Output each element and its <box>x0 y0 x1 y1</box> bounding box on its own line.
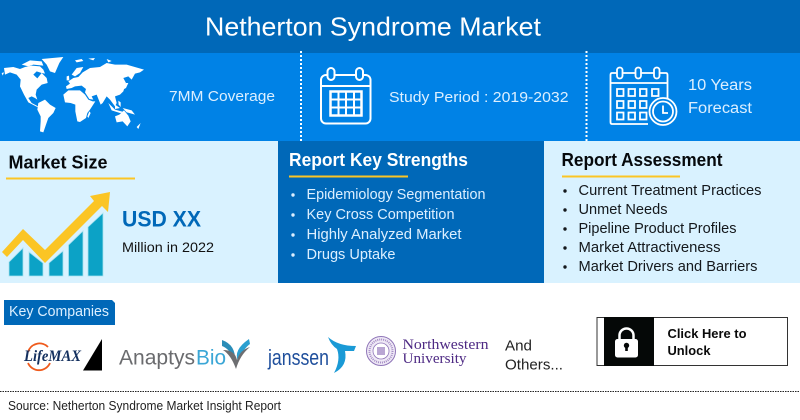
dotted divider 2 <box>586 51 588 141</box>
icon: padlock <box>615 328 638 358</box>
market value: USD XX <box>122 206 201 232</box>
study period label: Study Period : 2019-2032 <box>389 89 568 106</box>
list: assessment: Market Attractiveness <box>578 240 720 256</box>
logo: Janssen: janssen <box>267 345 329 370</box>
key companies tag <box>4 300 115 325</box>
list: key strengths: Key Cross Competition <box>306 207 454 223</box>
panel: market size <box>0 141 278 283</box>
market value note: Million in 2022 <box>122 239 214 255</box>
logo: Northwestern University <box>366 336 489 367</box>
icon: world map <box>2 57 144 132</box>
heading: market size: Market Size <box>8 152 108 172</box>
icon: forecast calendar with clock <box>610 68 676 125</box>
key companies tag: Key Companies <box>9 304 109 320</box>
chart: growth bars and arrow <box>2 192 110 276</box>
logo: AnaptysBio <box>119 339 250 370</box>
list: assessment: Unmet Needs <box>578 202 668 218</box>
icon: study period calendar <box>321 68 370 124</box>
coverage label: 7MM Coverage <box>169 88 275 105</box>
title: Netherton Syndrome Market <box>205 12 542 42</box>
logo: Northwestern University: University <box>402 351 467 367</box>
list: key strengths: Highly Analyzed Market <box>306 227 462 243</box>
coverage strip <box>0 51 800 141</box>
unlock button <box>597 317 788 366</box>
logo: Northwestern University: Northwestern <box>402 337 489 353</box>
unlock button: Unlock <box>668 344 711 358</box>
list: assessment <box>563 183 762 275</box>
dotted divider 1 <box>300 51 302 141</box>
source note: Source: Netherton Syndrome Market Insight Report <box>8 399 282 413</box>
logo: AnaptysBio: Anaptys <box>119 346 195 370</box>
logo: LifeMAX: LifeMAX <box>23 348 81 365</box>
and others note: And <box>505 338 532 354</box>
and others note <box>505 338 563 374</box>
coverage strip: Forecast <box>688 100 753 117</box>
logo: AnaptysBio: Bio <box>196 346 226 370</box>
list: assessment: Market Drivers and Barriers <box>578 259 758 275</box>
header band <box>0 0 800 53</box>
list: key strengths: Drugs Uptake <box>306 247 396 263</box>
forecast label: 10 Years <box>688 77 752 94</box>
unlock button: Click Here to <box>668 327 747 341</box>
logo: LifeMAX <box>23 339 102 370</box>
list: key strengths <box>291 187 486 263</box>
heading: report key strengths: Report Key Strengths <box>289 150 468 170</box>
and others note: Others... <box>505 356 563 374</box>
panel: report key strengths <box>278 141 544 283</box>
list: key strengths: Epidemiology Segmentation <box>306 187 486 203</box>
panel: report assessment <box>544 141 800 283</box>
list: assessment: Pipeline Product Profiles <box>578 221 736 237</box>
heading: report assessment: Report Assessment <box>562 150 723 170</box>
list: assessment: Current Treatment Practices <box>578 183 762 199</box>
logo: Janssen <box>267 337 356 373</box>
